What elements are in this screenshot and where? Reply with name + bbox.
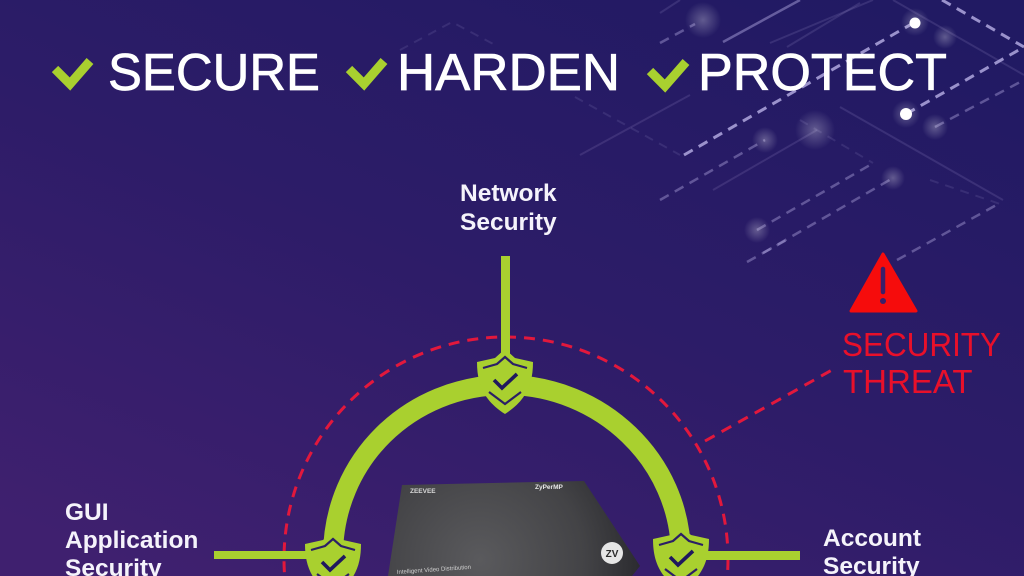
connector: gui	[214, 551, 314, 559]
label: gui application security: Application	[65, 527, 198, 554]
heading: harden: HARDEN	[397, 44, 620, 102]
icon: shield right	[653, 526, 709, 576]
check icon 2	[349, 61, 384, 84]
check icon 1	[55, 61, 90, 84]
green shield arc	[333, 385, 681, 556]
icon: warning triangle	[851, 254, 916, 311]
device logo: ZEEVEE	[410, 488, 436, 495]
connector: account	[700, 551, 800, 560]
title row	[55, 44, 947, 102]
connector: network	[501, 256, 510, 366]
text: security threat: THREAT	[843, 363, 973, 400]
device	[388, 481, 640, 576]
threat perimeter	[284, 337, 728, 576]
device badge	[601, 542, 623, 564]
glow nodes	[685, 2, 957, 243]
icon: shield left	[305, 531, 361, 576]
heading: protect: PROTECT	[698, 44, 947, 102]
label: network security: Security	[460, 209, 557, 236]
threat connector	[705, 370, 832, 441]
label: network security: Network	[460, 180, 557, 207]
heading: secure: SECURE	[108, 44, 320, 102]
circuit pattern	[400, 0, 1024, 262]
check icon 3	[650, 62, 686, 86]
text: security threat: SECURITY	[842, 326, 1001, 363]
label: gui application security: GUI	[65, 499, 109, 526]
label: account security: Account	[823, 525, 921, 552]
device product name: ZyPerMP	[535, 484, 563, 491]
device: ZV	[606, 549, 619, 560]
device caption: Intelligent Video Distribution	[397, 565, 471, 576]
icon: shield top	[477, 349, 533, 414]
